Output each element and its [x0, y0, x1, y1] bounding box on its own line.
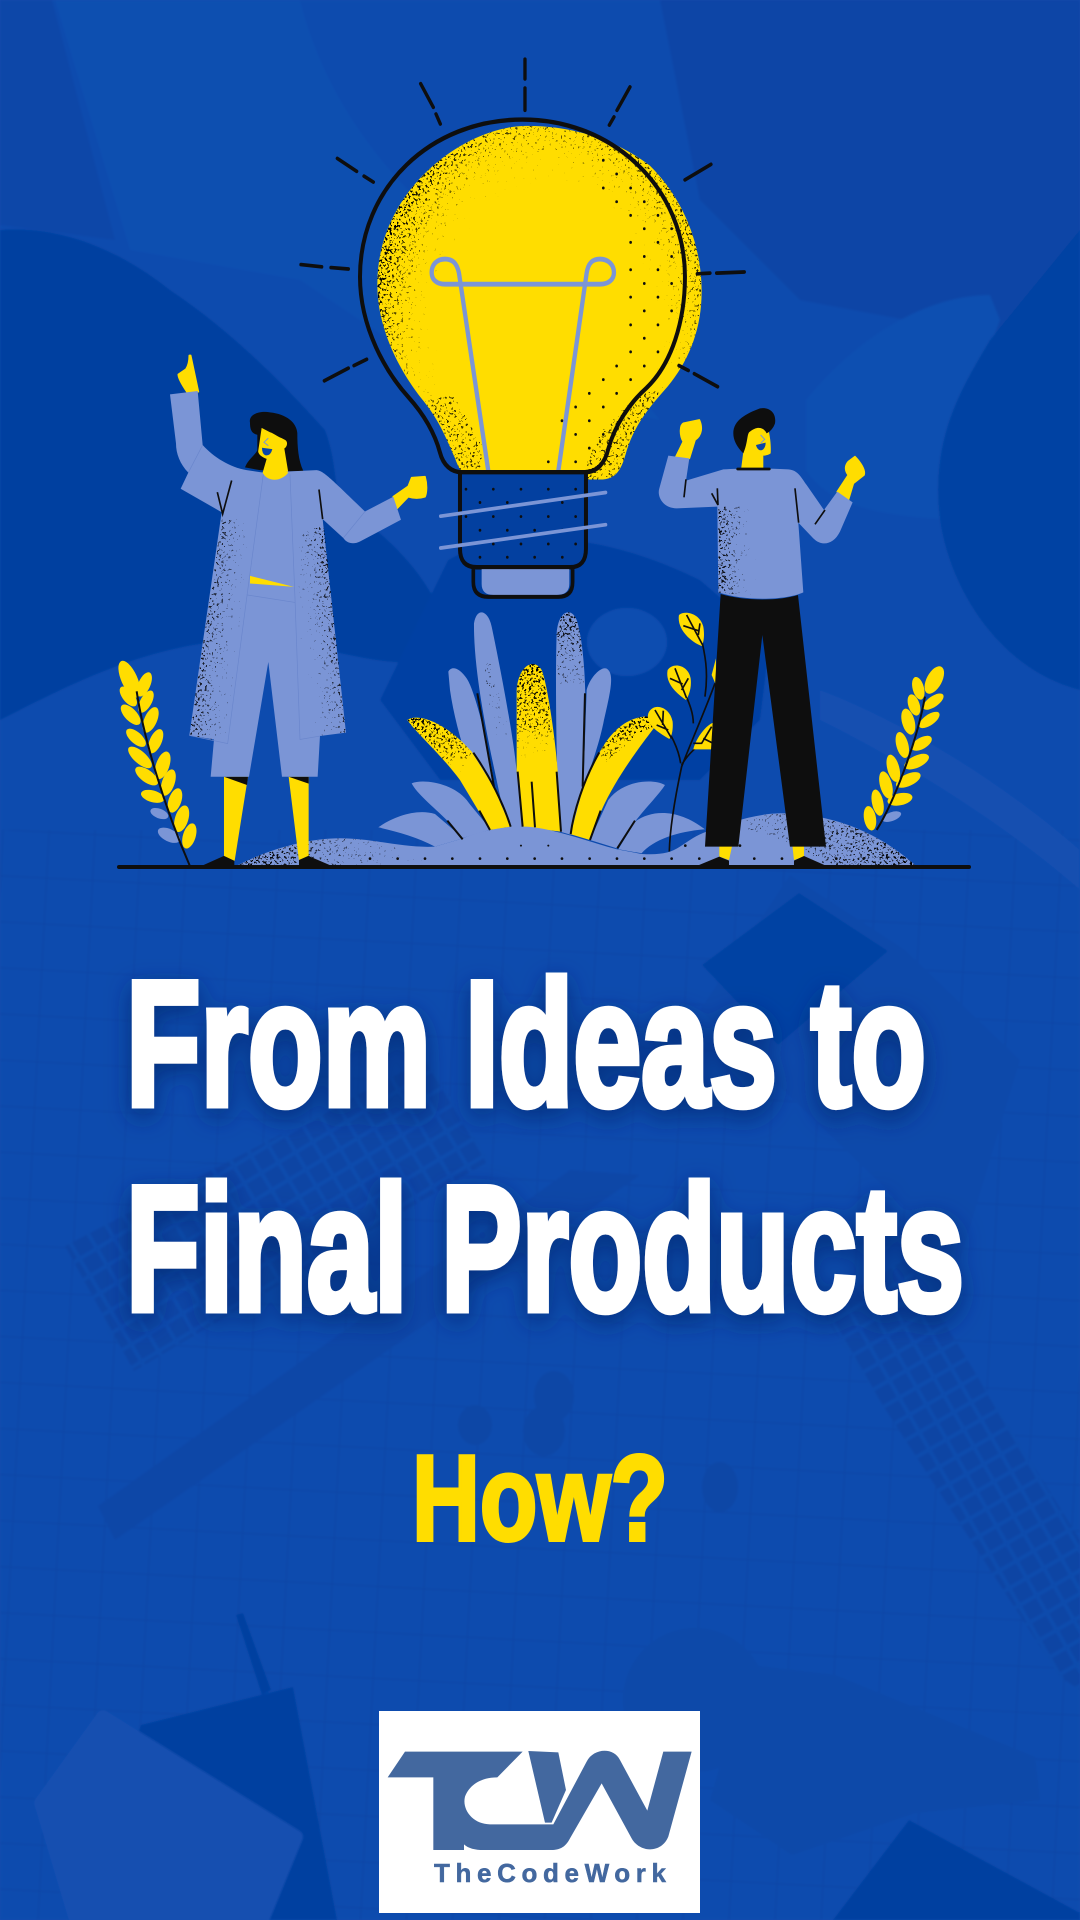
center yellow leaf stipple	[517, 664, 555, 767]
mound	[235, 813, 917, 867]
man trousers	[705, 594, 826, 847]
bulb outline	[360, 120, 685, 472]
illustration: man cheering	[659, 408, 864, 866]
woman coat stipple right	[297, 526, 346, 740]
illustration: woman pointing up	[170, 355, 426, 866]
mound stipple left	[235, 838, 435, 867]
bulb stipple shading	[377, 126, 702, 480]
man accents	[738, 465, 769, 473]
mound stipple right	[747, 813, 917, 867]
woman black accents	[217, 481, 323, 519]
yellow leaves	[407, 664, 655, 840]
man hands	[676, 420, 864, 500]
screw thread lines	[441, 493, 606, 548]
man neck and face	[741, 423, 771, 470]
man sweater stipple	[718, 507, 757, 597]
mound dots	[369, 844, 865, 860]
man mouth and nose	[756, 435, 766, 450]
logo wordmark: TheCodeWork	[434, 1858, 667, 1888]
light rays	[301, 59, 744, 387]
woman hair	[245, 412, 303, 472]
man sweater	[659, 456, 853, 599]
bulb base outline	[473, 569, 573, 597]
back leaves	[378, 612, 705, 853]
title: From Ideas to Final Products	[126, 944, 964, 1348]
woman coat, arms and shorts	[170, 391, 401, 777]
woman coat seams	[188, 445, 365, 744]
man shoes	[697, 856, 827, 866]
logo: TheCodeWork	[379, 1711, 700, 1913]
plant vein lines	[447, 693, 635, 848]
filament	[432, 259, 614, 471]
woman mouth and nose	[262, 438, 272, 455]
man hair	[733, 408, 775, 453]
woman hands	[178, 355, 426, 509]
woman top pocket	[250, 576, 294, 587]
woman coat stipple left	[189, 519, 250, 744]
man sleeve lines	[684, 479, 825, 524]
illustration: right wheat sprig	[862, 663, 948, 831]
logo mark TCW	[388, 1751, 692, 1850]
woman sock shadows and shoes	[202, 777, 332, 866]
illustration: lightbulb	[301, 59, 744, 597]
bulb base contact	[482, 569, 569, 595]
screw cap dots	[465, 488, 577, 559]
back leaf stipple	[483, 612, 584, 757]
subtitle: How?: How?	[412, 1430, 668, 1566]
bulb yellow body	[377, 126, 702, 480]
woman neckline	[263, 467, 288, 480]
man ankles	[719, 845, 804, 860]
woman legs	[224, 777, 309, 861]
ground line	[117, 865, 971, 869]
illustration: ground plants and mound	[235, 612, 917, 867]
bulb neck stipple right	[580, 392, 663, 480]
screw cap	[460, 472, 586, 567]
bulb neck stipple left	[423, 395, 483, 480]
woman face and neck	[258, 428, 288, 480]
bulb halftone dots	[547, 159, 673, 463]
side yellow leaf stipple	[407, 716, 655, 780]
branch plant	[648, 613, 716, 852]
illustration: left wheat sprig	[114, 658, 199, 866]
